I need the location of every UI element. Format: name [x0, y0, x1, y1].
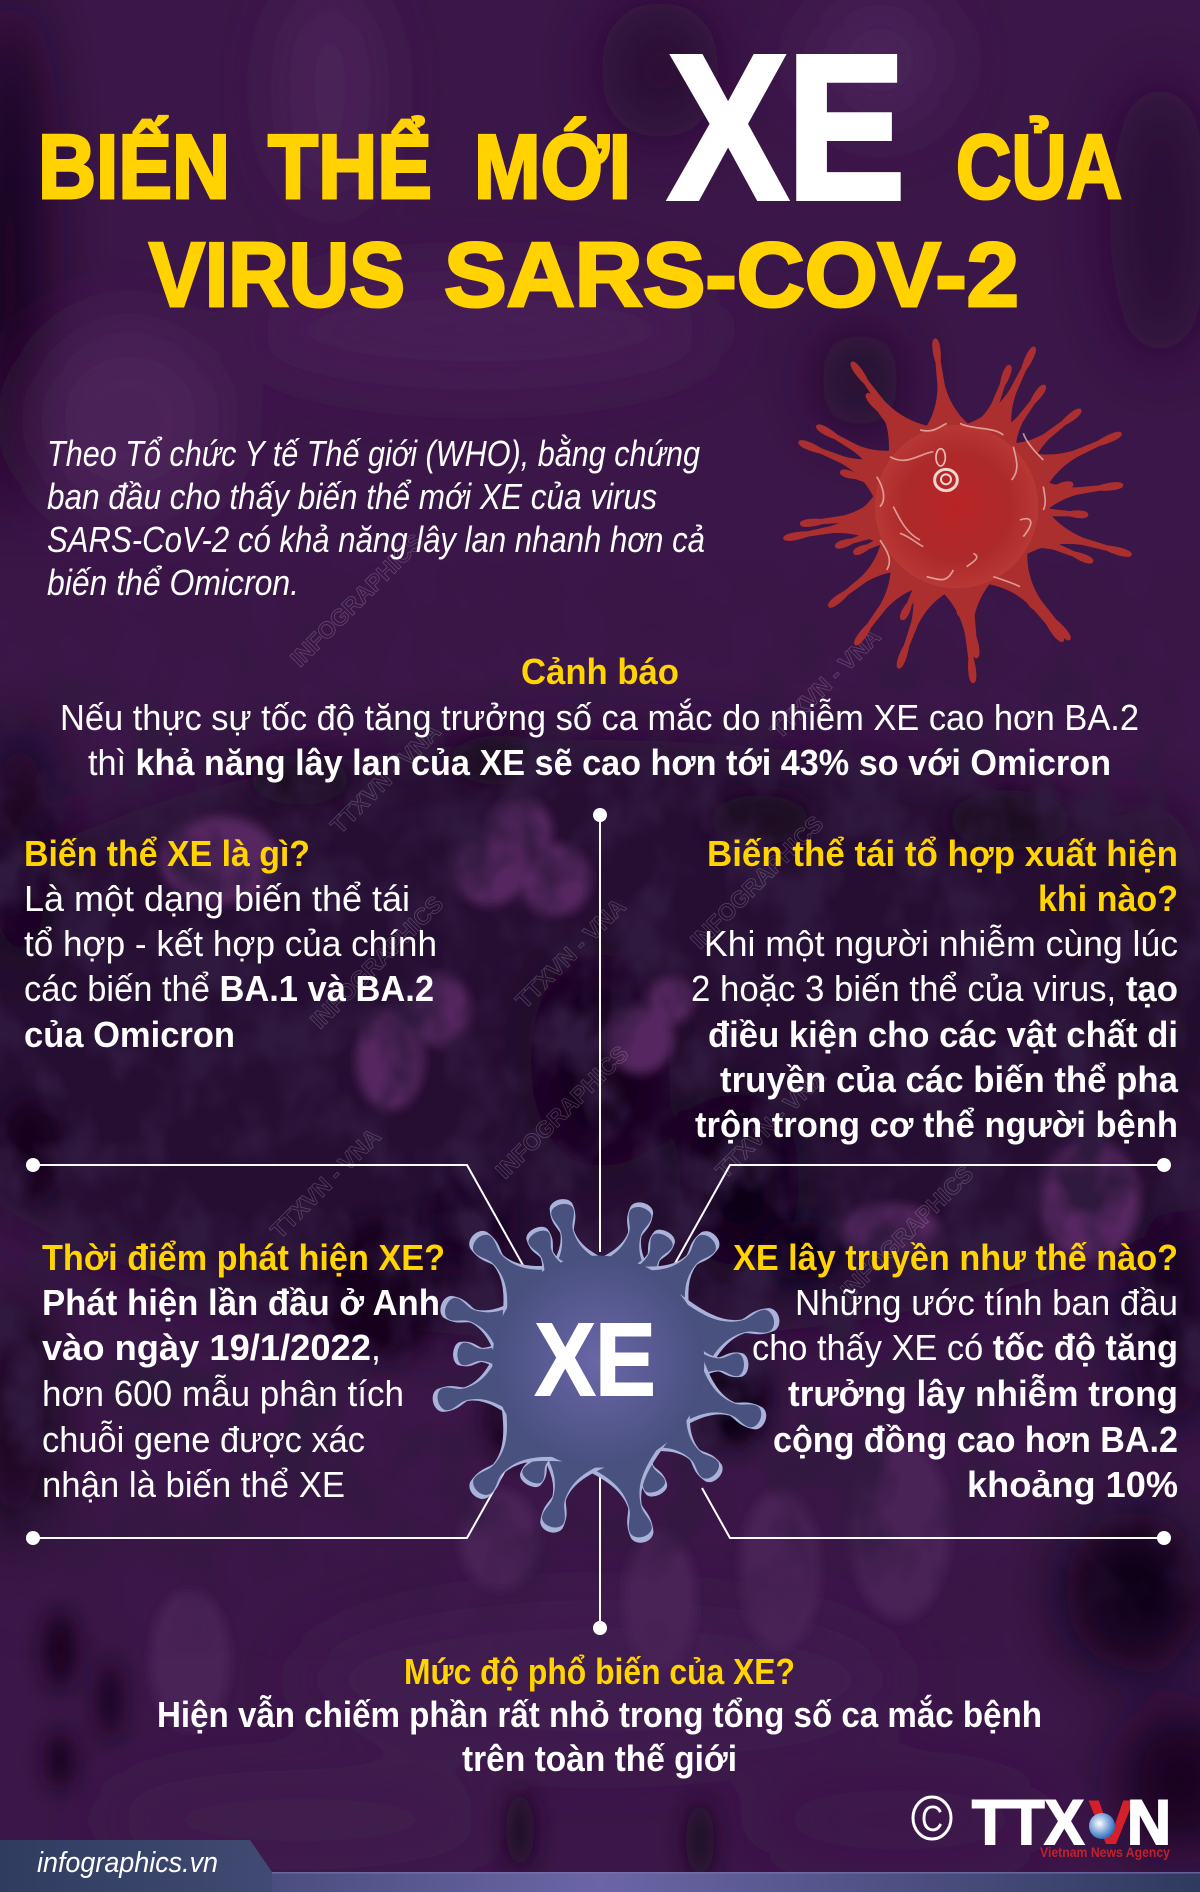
title: THỂ: [268, 116, 432, 218]
title: XE: [669, 13, 905, 242]
footer bar: [0, 1840, 1200, 1892]
watermarks: TTXVN - VNA: [325, 718, 446, 839]
title: BIẾN: [38, 116, 230, 218]
panel: prevalence of XE: Mức độ phổ biến của XE?: [404, 1651, 795, 1692]
panel: what is XE: [24, 833, 437, 1055]
warning block: [60, 651, 1139, 783]
warning block: thì khả năng lây lan của XE sẽ cao hơn tới 43% so với Omicron: [88, 742, 1111, 783]
logo: TTXVN copyright: Vietnam News Agency: [1040, 1844, 1170, 1860]
panel: what is XE: các biến thể BA.1 và BA.2: [24, 968, 434, 1009]
watermarks: [265, 528, 978, 1304]
panel: how XE spreads: trưởng lây nhiễm trong: [788, 1373, 1178, 1414]
site name: infographics.vn: [37, 1847, 218, 1879]
panel: prevalence of XE: trên toàn thế giới: [462, 1738, 737, 1779]
panel: how XE spreads: cho thấy XE có tốc độ tăng: [752, 1327, 1178, 1368]
logo: TTXVN copyright: V: [1088, 1788, 1134, 1858]
panel: when XE was detected: Phát hiện lần đầu ở Anh: [42, 1282, 440, 1323]
watermarks: INFOGRAPHICS: [285, 528, 428, 672]
watermarks: TTXVN - VNA: [510, 893, 631, 1014]
intro paragraph: Theo Tổ chức Y tế Thế giới (WHO), bằng chứng: [47, 433, 700, 474]
label: XE: XE: [535, 1301, 656, 1417]
intro paragraph: [47, 433, 705, 603]
panel: when recombinant appears: [691, 833, 1179, 1145]
panel: when XE was detected: nhận là biến thể XE: [42, 1464, 345, 1505]
title: MỚI: [474, 117, 631, 218]
panel: what is XE: Là một dạng biến thể tái: [24, 878, 410, 919]
panel: how XE spreads: XE lây truyền như thế nào?: [733, 1237, 1178, 1278]
watermarks: INFOGRAPHICS: [490, 1040, 633, 1184]
intro paragraph: biến thể Omicron.: [47, 562, 299, 603]
icon: central XE virus: [423, 1190, 789, 1552]
logo: TTXVN copyright: TTX: [972, 1788, 1084, 1858]
title: VIRUS: [149, 225, 405, 326]
panel: when recombinant appears: trộn trong cơ thể người bệnh: [695, 1104, 1178, 1145]
panel: what is XE: tổ hợp - kết hợp của chính: [24, 923, 437, 964]
watermarks: INFOGRAPHICS: [305, 890, 448, 1034]
panel: when recombinant appears: điều kiện cho các vật chất di: [708, 1014, 1178, 1055]
warning block: Nếu thực sự tốc độ tăng trưởng số ca mắc do nhiễm XE cao hơn BA.2: [60, 697, 1139, 738]
panel: when XE was detected: chuỗi gene được xác: [42, 1419, 365, 1460]
panel: when XE was detected: [42, 1237, 445, 1505]
panel: prevalence of XE: Hiện vẫn chiếm phần rất nhỏ trong tổng số ca mắc bệnh: [157, 1693, 1042, 1735]
panel: when recombinant appears: truyền của các biến thể pha: [720, 1059, 1179, 1100]
title: SARS-COV-2: [444, 225, 1019, 326]
panel: prevalence of XE: [157, 1651, 1042, 1779]
panel: when recombinant appears: 2 hoặc 3 biến thể của virus, tạo: [691, 968, 1178, 1009]
intro paragraph: SARS-CoV-2 có khả năng lây lan nhanh hơn cả: [47, 519, 705, 560]
panel: when XE was detected: vào ngày 19/1/2022,: [42, 1327, 381, 1368]
logo: TTXVN copyright: C: [921, 1798, 943, 1839]
panel: when recombinant appears: Khi một người nhiễm cùng lúc: [704, 923, 1178, 964]
panel: how XE spreads: cộng đồng cao hơn BA.2: [773, 1419, 1178, 1460]
panel: how XE spreads: Những ước tính ban đầu: [795, 1282, 1178, 1323]
panel: how XE spreads: khoảng 10%: [967, 1464, 1178, 1505]
panel: what is XE: của Omicron: [24, 1014, 235, 1055]
watermarks: TTXVN - VNA: [765, 623, 886, 744]
panel: what is XE: Biến thể XE là gì?: [24, 833, 310, 874]
panel: how XE spreads: [733, 1237, 1178, 1505]
panel: when recombinant appears: Biến thể tái tổ hợp xuất hiện: [707, 833, 1178, 874]
illustration: red coronavirus: [775, 326, 1144, 688]
watermarks: TTXVN - VNA: [265, 1123, 386, 1244]
logo: TTXVN copyright: [913, 1788, 1171, 1860]
connector lines: [26, 808, 1171, 1635]
panel: when recombinant appears: khi nào?: [1038, 878, 1178, 919]
watermarks: INFOGRAPHICS: [835, 1160, 978, 1304]
panel: when XE was detected: hơn 600 mẫu phân tích: [42, 1373, 404, 1414]
warning block: Cảnh báo: [521, 651, 679, 692]
watermarks: INFOGRAPHICS: [685, 810, 828, 954]
title: CỦA: [956, 116, 1122, 218]
title: [38, 13, 1122, 326]
panel: when XE was detected: Thời điểm phát hiện XE?: [42, 1237, 445, 1278]
logo: TTXVN copyright: N: [1127, 1788, 1171, 1858]
intro paragraph: ban đầu cho thấy biến thể mới XE của virus: [47, 476, 657, 517]
watermarks: TTXVN - VNA: [710, 1063, 831, 1184]
